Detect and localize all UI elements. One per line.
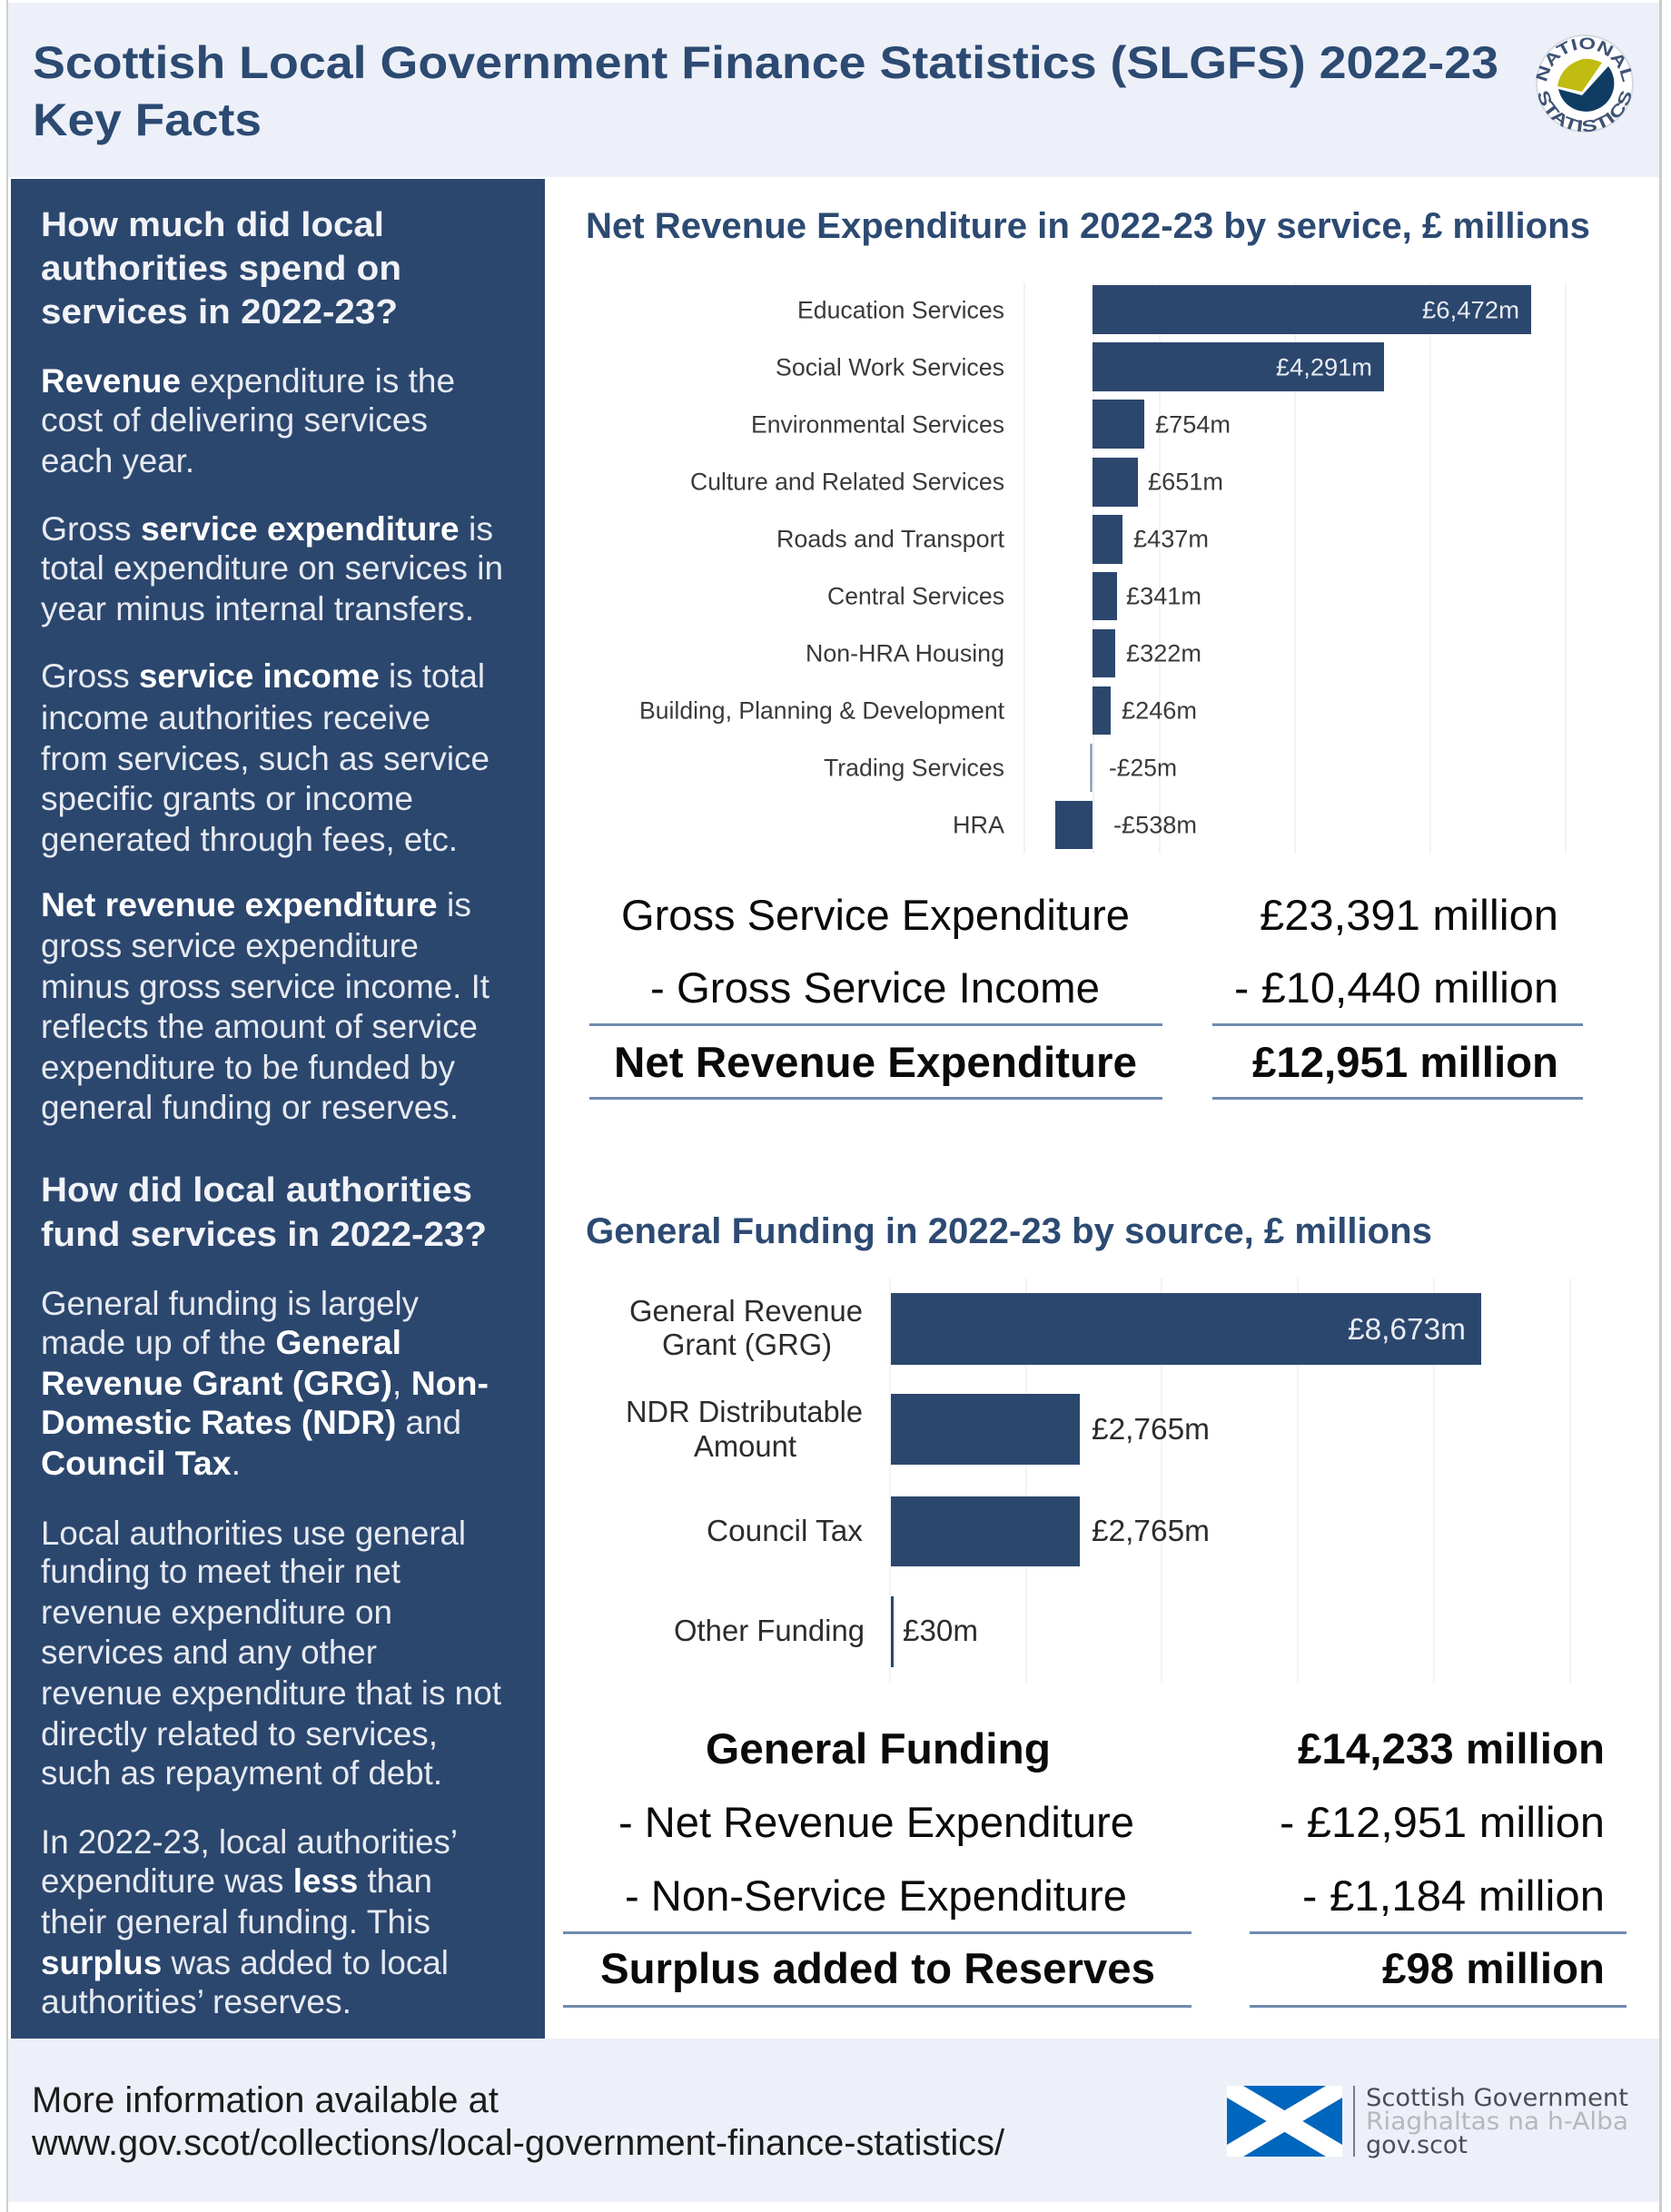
text block: use of general funding: directly related to services, (41, 1715, 438, 1753)
heading: how much did local authorities spend: How much did local (41, 206, 384, 244)
bar: Central Services: £341m (1126, 583, 1201, 610)
bar: NDR Distributable Amount: Amount (694, 1429, 796, 1463)
text block: general funding make-up: made up of the General (41, 1324, 401, 1361)
table: surplus summary: £98 million (1382, 1944, 1605, 1992)
bar: Trading Services: Trading Services (824, 754, 1004, 781)
bar: General Revenue Grant: General Revenue (629, 1294, 863, 1328)
bar: Building, Planning and Development: Building, Planning & Development (639, 697, 1005, 725)
bar: Culture and Related Services: Culture and Related Services (690, 469, 1004, 496)
text block: net revenue expenditure: expenditure to be funded by (41, 1049, 455, 1086)
heading: net revenue expenditure chart: Net Revenue Expenditure in 2022-23 by service, £ millions (586, 206, 1590, 246)
bar: HRA (953, 801, 1197, 849)
text block: gross service expenditure (41, 510, 503, 627)
bar chart: net revenue expenditure by service (639, 282, 1566, 854)
text block: gross service income: specific grants or income (41, 780, 413, 817)
footer band (8, 2039, 1659, 2202)
heading: how much did local authorities spend: authorities spend on (41, 250, 401, 288)
bar: Council Tax: Council Tax (707, 1514, 864, 1547)
text block: net revenue expenditure (41, 886, 490, 1126)
bar: Social Work Services: £4,291m (1276, 354, 1372, 381)
bar: Non-HRA Housing: £322m (1126, 639, 1201, 667)
text block: revenue expenditure: cost of delivering services (41, 401, 428, 439)
text block: general funding make-up: Domestic Rates (NDR) and (41, 1404, 461, 1441)
bar: Trading Services (824, 744, 1177, 792)
bar: Building, Planning and Development: £246m (1122, 697, 1197, 725)
icon: National Statistics badge: STATISTICS (1538, 91, 1631, 132)
bar: Environmental Services (751, 400, 1231, 449)
table: surplus summary: General Funding (706, 1724, 1051, 1773)
bar: Culture and Related Services: £651m (1148, 469, 1223, 496)
title (33, 37, 1498, 145)
table: surplus summary: - Net Revenue Expenditure (618, 1798, 1134, 1846)
heading: how did local authorities fund services: fund services in 2022-23? (41, 1216, 487, 1254)
bar: Building, Planning and Development (639, 686, 1197, 735)
text block: general funding make-up: Council Tax. (41, 1445, 241, 1482)
bar: Council Tax: £2,765m (1092, 1514, 1210, 1547)
table: surplus summary: - £1,184 million (1302, 1871, 1605, 1920)
text block: net revenue expenditure: general funding or reserves. (41, 1089, 459, 1126)
bar: Central Services: Central Services (827, 583, 1004, 610)
heading: how much did local authorities spend (41, 206, 401, 331)
bar: Trading Services: -£25m (1109, 754, 1177, 781)
title: Scottish Local Government Finance Statistics (SLGFS) 2022-23 (33, 37, 1498, 88)
text block: surplus: expenditure was less than (41, 1862, 432, 1900)
bar: Non-HRA Housing: Non-HRA Housing (806, 639, 1004, 667)
text block: use of general funding (41, 1515, 502, 1792)
text block: more information link: More information available at (32, 2080, 499, 2120)
bar: Culture and Related Services (690, 458, 1223, 507)
panel: left narrative (11, 179, 545, 2039)
text block: gross service expenditure: total expenditure on services in (41, 549, 503, 587)
text block: use of general funding: such as repayment of debt. (41, 1754, 442, 1792)
table: surplus summary: - £12,951 million (1280, 1798, 1605, 1846)
icon: Scottish saltire flag (1227, 2086, 1342, 2157)
text block: general funding make-up (41, 1285, 489, 1482)
table: net revenue expenditure summary: Gross Service Expenditure (621, 891, 1130, 939)
text block: gross service income: Gross service income is total (41, 657, 485, 695)
bar: Roads and Transport: £437m (1133, 525, 1209, 552)
heading: how much did local authorities spend: services in 2022-23? (41, 293, 398, 331)
text block: net revenue expenditure: Net revenue expenditure is (41, 886, 471, 923)
table: net revenue expenditure summary: £23,391 million (1260, 891, 1558, 939)
bar: Other Funding: Other Funding (674, 1614, 865, 1647)
text block: more information link (31, 2080, 1005, 2163)
text block: general funding make-up: General funding is largely (41, 1285, 419, 1322)
title: Key Facts (33, 94, 262, 145)
text block: use of general funding: services and any other (41, 1634, 377, 1671)
text block: general funding make-up: Revenue Grant (GRG), Non- (41, 1365, 489, 1402)
bar: Environmental Services: Environmental Services (751, 410, 1004, 438)
bar: General Revenue Grant (629, 1293, 1481, 1365)
text block: revenue expenditure: each year. (41, 442, 194, 479)
text block: use of general funding: revenue expenditure that is not (41, 1674, 502, 1712)
text block: surplus (41, 1823, 458, 2020)
text block: surplus: surplus was added to local (41, 1944, 449, 1981)
text block: more information link: www.gov.scot/collections/local-government-finance-statistics/ (31, 2123, 1005, 2163)
text block: surplus: their general funding. This (41, 1903, 430, 1940)
icon: National Statistics badge: NATIONAL (1536, 38, 1631, 82)
bar: Environmental Services: £754m (1155, 410, 1231, 438)
bar: Social Work Services (776, 342, 1384, 391)
text block: net revenue expenditure: gross service expenditure (41, 927, 419, 964)
bar: General Revenue Grant: £8,673m (1348, 1312, 1466, 1346)
logo text: Scottish Government: Riaghaltas na h-Alba (1366, 2108, 1628, 2136)
bar: Central Services (827, 572, 1201, 620)
logo text: Scottish Government (1353, 2084, 1628, 2159)
table: net revenue expenditure summary: Net Revenue Expenditure (614, 1038, 1137, 1086)
text block: gross service expenditure: year minus internal transfers. (41, 590, 474, 627)
table: net revenue expenditure summary (589, 891, 1583, 1100)
bar: Non-HRA Housing (806, 629, 1201, 677)
bar: Education Services (797, 285, 1531, 334)
header band (8, 3, 1659, 177)
heading: how did local authorities fund services (41, 1171, 487, 1254)
bar chart: general funding by source (626, 1279, 1570, 1683)
table: net revenue expenditure summary: - Gross Service Income (650, 963, 1100, 1012)
bar: Roads and Transport (776, 515, 1209, 564)
logo text: Scottish Government: Scottish Government (1366, 2084, 1628, 2112)
text block: revenue expenditure (41, 362, 455, 479)
text block: gross service income: income authorities receive (41, 699, 430, 736)
bar: Council Tax (707, 1496, 1210, 1566)
bar: NDR Distributable Amount (626, 1394, 1210, 1465)
table: surplus summary (563, 1724, 1627, 2008)
bar: NDR Distributable Amount: NDR Distributable (626, 1395, 863, 1428)
text block: use of general funding: revenue expenditure on (41, 1594, 392, 1631)
table: surplus summary: Surplus added to Reserves (600, 1944, 1155, 1992)
heading: general funding chart: General Funding in 2022-23 by source, £ millions (586, 1211, 1432, 1251)
table: net revenue expenditure summary: - £10,440 million (1234, 963, 1558, 1012)
table: net revenue expenditure summary: £12,951 million (1252, 1038, 1558, 1086)
bar: HRA: -£538m (1113, 812, 1197, 839)
text block: gross service income: from services, such as service (41, 740, 489, 777)
heading: how did local authorities fund services: How did local authorities (41, 1171, 472, 1210)
bar: General Revenue Grant: Grant (GRG) (662, 1328, 832, 1361)
text block: net revenue expenditure: minus gross service income. It (41, 968, 490, 1005)
text block: surplus: authorities’ reserves. (41, 1983, 351, 2020)
table: surplus summary: - Non-Service Expenditure (625, 1871, 1127, 1920)
text block: revenue expenditure: Revenue expenditure is the (41, 362, 455, 400)
text block: gross service expenditure: Gross service expenditure is (41, 510, 493, 548)
bar: NDR Distributable Amount: £2,765m (1092, 1412, 1210, 1446)
bar: Education Services: Education Services (797, 296, 1004, 323)
bar: Other Funding (674, 1596, 978, 1667)
text block: net revenue expenditure: reflects the amount of service (41, 1008, 478, 1045)
text block: gross service income: generated through fees, etc. (41, 821, 458, 858)
text block: use of general funding: funding to meet their net (41, 1553, 401, 1590)
bar: Social Work Services: Social Work Services (776, 354, 1004, 381)
bar: Education Services: £6,472m (1422, 296, 1519, 323)
text block: surplus: In 2022-23, local authorities’ (41, 1823, 458, 1861)
bar: Other Funding: £30m (903, 1614, 978, 1647)
bar: Roads and Transport: Roads and Transport (776, 525, 1005, 552)
bar: HRA: HRA (953, 812, 1004, 839)
text block: use of general funding: Local authorities use general (41, 1515, 466, 1552)
text block: gross service income (41, 657, 489, 858)
logo text: Scottish Government: gov.scot (1366, 2131, 1468, 2159)
icon: National Statistics badge (1536, 35, 1634, 133)
table: surplus summary: £14,233 million (1298, 1724, 1605, 1773)
